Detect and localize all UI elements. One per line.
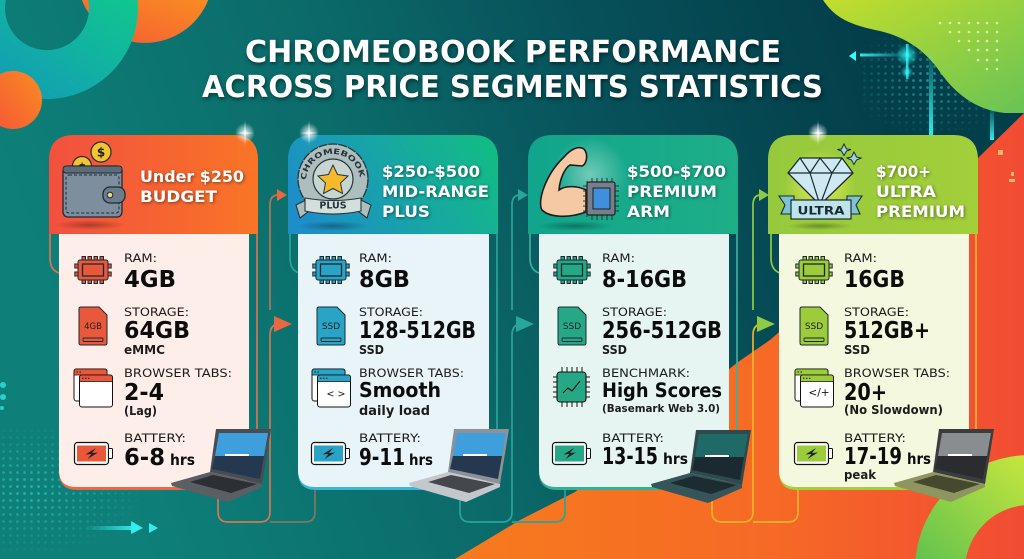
arrow heads xyxy=(757,189,775,332)
RAM spec xyxy=(602,251,687,293)
green ring bottom right xyxy=(916,455,1024,559)
RAM spec: RAM: xyxy=(844,251,877,265)
RAM spec xyxy=(844,251,905,293)
heading: $700+ Ultra Premium xyxy=(876,162,965,221)
header band xyxy=(528,135,738,234)
orange circle top left xyxy=(82,0,208,43)
teal ring top left xyxy=(0,0,138,99)
RAM spec: 8GB xyxy=(359,265,410,293)
storage spec xyxy=(602,305,722,357)
title: CHROMEOBOOK PERFORMANCE xyxy=(245,35,781,70)
heading: Under $250 Budget: Under $250 xyxy=(140,167,244,186)
icon: battery xyxy=(552,442,590,464)
heading: $250-$500 Mid-Range Plus xyxy=(382,162,489,221)
panel: mid-range plus xyxy=(288,135,509,502)
battery spec: 9-11 xyxy=(359,443,405,471)
browser tabs spec: BROWSER TABS: xyxy=(124,366,232,380)
browser tabs spec: 2-4 xyxy=(124,378,164,406)
icon: battery xyxy=(794,442,832,464)
icon: storage card: SSD xyxy=(322,322,340,332)
icon: storage card xyxy=(558,307,586,345)
storage spec: eMMC xyxy=(124,343,165,357)
browser tabs spec xyxy=(124,366,232,418)
header band xyxy=(49,135,258,234)
green blob top right xyxy=(823,0,1024,113)
icon: battery xyxy=(74,442,112,464)
battery spec xyxy=(359,431,433,471)
heading: $700+ Ultra Premium: PREMIUM xyxy=(876,202,965,221)
arrow heads xyxy=(516,189,534,332)
browser tabs spec: (No Slowdown) xyxy=(844,403,943,417)
halftone dots lower left xyxy=(2,436,124,544)
benchmark spec: High Scores xyxy=(602,379,722,402)
storage spec xyxy=(124,305,190,357)
icon: storage card: SSD xyxy=(563,322,581,332)
storage spec: STORAGE: xyxy=(359,305,423,319)
RAM spec: RAM: xyxy=(359,251,392,265)
orange diagonal shape xyxy=(455,113,1024,559)
icon: storage card: 4GB xyxy=(84,322,102,332)
connector lines: mid-range xyxy=(290,189,565,522)
icon: benchmark chip xyxy=(553,367,590,407)
small orange circle xyxy=(0,71,42,129)
connector lines: ultra xyxy=(771,234,976,480)
battery spec: hrs xyxy=(663,450,688,468)
benchmark spec: (Basemark Web 3.0) xyxy=(602,403,720,415)
body card xyxy=(539,234,729,490)
browser tabs spec: daily load xyxy=(359,404,430,419)
RAM spec: RAM: xyxy=(602,251,635,265)
heading: $250-$500 Mid-Range Plus: PLUS xyxy=(382,202,430,221)
battery spec: peak xyxy=(844,468,877,482)
header band xyxy=(288,135,498,234)
icon: RAM chip xyxy=(313,256,349,284)
icon: wallet with coins: $ xyxy=(78,161,86,175)
body card xyxy=(298,234,489,490)
title: ACROSS PRICE SEGMENTS STATISTICS xyxy=(202,70,823,105)
heading: $500-$700 Premium Arm xyxy=(627,162,726,221)
icon: battery xyxy=(312,442,350,464)
heading: Under $250 Budget: BUDGET xyxy=(140,187,217,206)
battery spec: BATTERY: xyxy=(124,431,186,445)
icon: Chromebook Plus badge xyxy=(295,143,372,230)
heading: $500-$700 Premium Arm: $500-$700 xyxy=(627,162,726,181)
battery spec xyxy=(602,431,688,470)
icon: diamond with ultra ribbon: ULTRA xyxy=(798,204,845,218)
browser tabs spec: (Lag) xyxy=(124,404,157,418)
icon: RAM chip xyxy=(554,256,590,284)
battery spec: hrs xyxy=(907,450,931,468)
heading: $700+ Ultra Premium: ULTRA xyxy=(876,182,937,201)
body fill xyxy=(779,234,969,487)
browser tabs spec xyxy=(359,366,464,419)
icon: storage card xyxy=(317,307,345,345)
heading: $500-$700 Premium Arm: ARM xyxy=(627,202,670,221)
battery spec: 17-19 xyxy=(844,442,902,470)
heading: $500-$700 Premium Arm: PREMIUM xyxy=(627,182,717,201)
RAM spec xyxy=(124,251,176,293)
icon: RAM chip xyxy=(796,256,832,284)
panel: premium arm xyxy=(528,135,751,503)
storage spec xyxy=(844,305,930,357)
white dot grid xyxy=(939,22,998,70)
battery spec: hrs xyxy=(409,451,433,469)
icon: browser tabs with code: </+ xyxy=(808,387,830,399)
icon: flexed arm with chip xyxy=(537,137,628,231)
storage spec: SSD xyxy=(602,343,627,357)
storage spec: SSD xyxy=(359,343,384,357)
icon: browser tabs xyxy=(74,369,112,407)
browser tabs spec: BROWSER TABS: xyxy=(844,366,950,380)
RAM spec xyxy=(359,251,410,293)
battery spec: hrs xyxy=(170,451,195,469)
storage spec: 128-512GB xyxy=(359,316,476,344)
glow marks left edge xyxy=(0,382,6,410)
body fill xyxy=(298,234,489,487)
connector lines: budget xyxy=(50,189,315,522)
heading: $250-$500 Mid-Range Plus: MID-RANGE xyxy=(382,182,489,201)
icon: RAM chip xyxy=(75,256,111,284)
icon: browser tabs: < > xyxy=(327,389,345,400)
glowing arrow top right xyxy=(849,44,918,79)
battery spec: 13-15 xyxy=(602,442,658,470)
body card xyxy=(779,234,969,490)
body fill xyxy=(539,234,729,487)
browser tabs spec: BROWSER TABS: xyxy=(359,366,464,380)
RAM spec: RAM: xyxy=(124,251,157,265)
benchmark spec xyxy=(602,366,722,415)
storage spec xyxy=(359,305,476,357)
icon: Chromebook Plus badge: PLUS xyxy=(319,200,347,212)
icon: diamond with ultra ribbon xyxy=(779,144,862,230)
storage spec: SSD xyxy=(844,343,870,357)
light flares on card tops xyxy=(235,120,828,146)
body card xyxy=(59,234,249,490)
title xyxy=(202,35,823,105)
storage spec: STORAGE: xyxy=(124,305,189,319)
RAM spec: 8-16GB xyxy=(602,265,687,293)
heading: $250-$500 Mid-Range Plus: $250-$500 xyxy=(382,162,480,181)
battery spec xyxy=(844,431,931,482)
browser tabs spec xyxy=(844,366,950,417)
RAM spec: 4GB xyxy=(124,265,176,293)
browser tabs spec: Smooth xyxy=(359,378,441,402)
RAM spec: 16GB xyxy=(844,265,905,293)
icon: storage card: SSD xyxy=(805,322,823,332)
connector lines: premium arm xyxy=(530,189,798,522)
battery spec: BATTERY: xyxy=(844,431,906,445)
body fill xyxy=(59,234,249,487)
laptop xyxy=(894,429,994,502)
laptop xyxy=(651,430,751,503)
heading: Under $250 Budget xyxy=(140,167,244,206)
halftone dots upper right xyxy=(863,38,992,130)
storage spec: 64GB xyxy=(124,316,190,344)
light marks on orange xyxy=(998,150,1015,182)
icon: Chromebook Plus badge: CHROMEBOOK xyxy=(300,148,366,180)
storage spec: STORAGE: xyxy=(844,305,909,319)
storage spec: 512GB+ xyxy=(844,316,930,344)
laptop xyxy=(409,429,509,502)
storage spec: 256-512GB xyxy=(602,316,722,344)
header band xyxy=(768,135,978,234)
battery spec: BATTERY: xyxy=(602,431,664,445)
icon: browser tabs with code xyxy=(795,369,834,407)
icon: storage card xyxy=(79,307,107,345)
heading: $700+ Ultra Premium: $700+ xyxy=(876,162,931,181)
storage spec: STORAGE: xyxy=(602,305,667,319)
browser tabs spec: 20+ xyxy=(844,378,887,406)
icon: browser tabs xyxy=(312,369,350,407)
battery spec xyxy=(124,431,195,471)
arrow heads xyxy=(274,189,292,332)
panel: ultra premium xyxy=(768,135,994,502)
icon: wallet with coins xyxy=(55,142,125,230)
laptop xyxy=(171,429,271,502)
icon: wallet with coins: $ xyxy=(97,146,105,160)
glowing vertical lines xyxy=(929,45,994,140)
battery spec: BATTERY: xyxy=(359,431,421,445)
panel: budget xyxy=(49,135,271,502)
glowing arrows bottom left xyxy=(85,521,158,534)
battery spec: 6-8 xyxy=(124,443,165,471)
benchmark spec: BENCHMARK: xyxy=(602,366,690,380)
icon: storage card xyxy=(800,307,828,345)
